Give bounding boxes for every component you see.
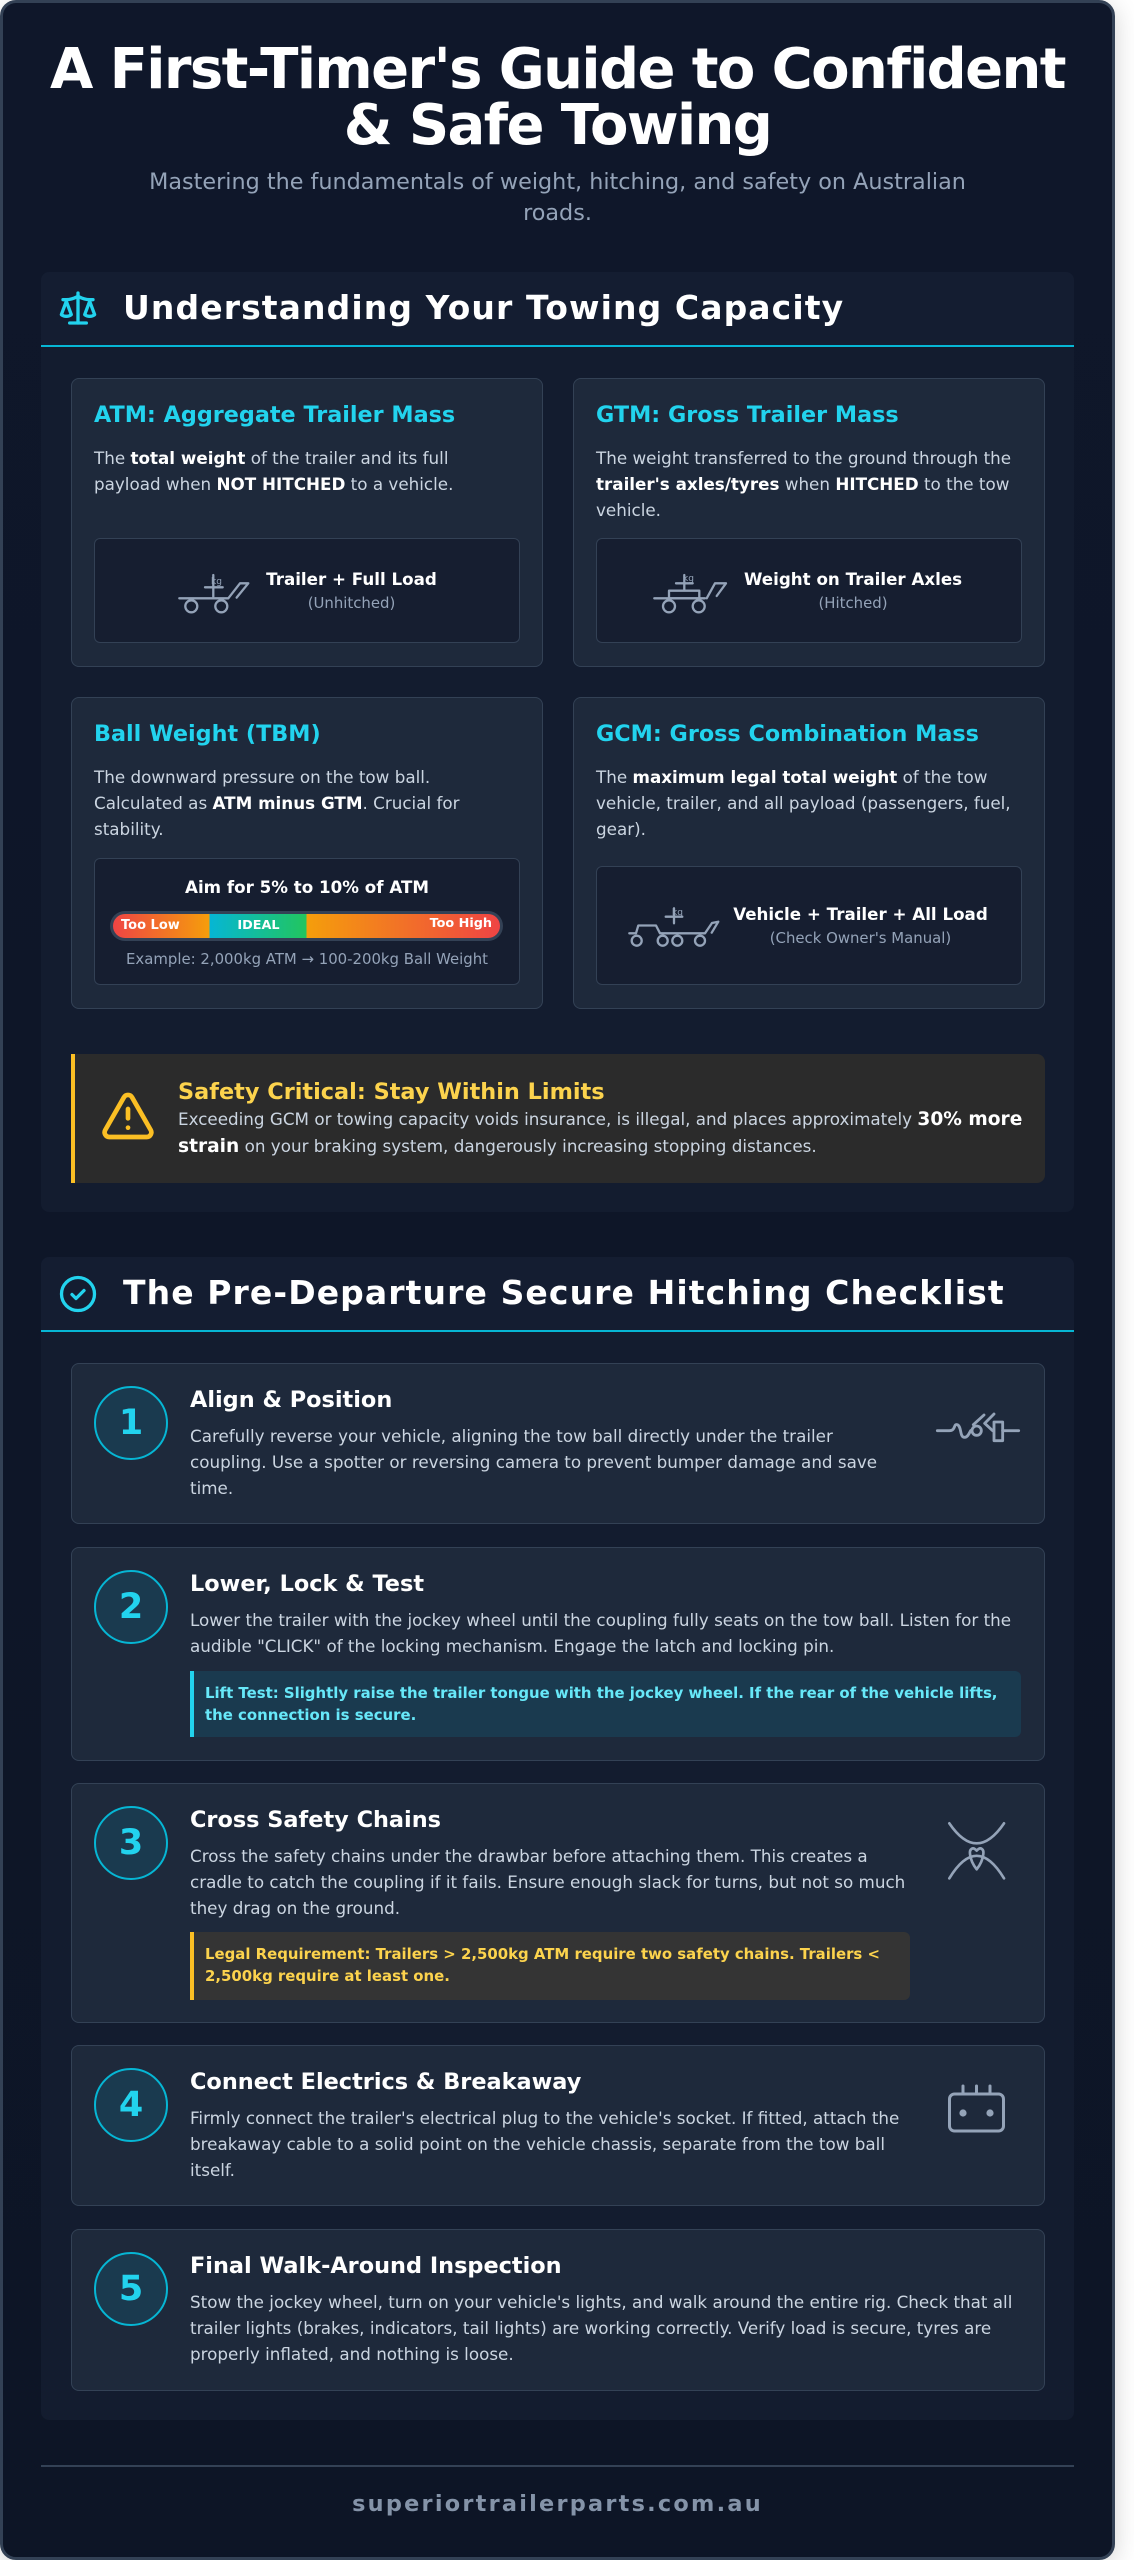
step number 5	[94, 2252, 168, 2326]
sub-label: check owner's manual: (Check Owner's Manual)	[770, 929, 951, 947]
step 3 heading: Cross Safety Chains	[190, 1807, 441, 1833]
icon: crossed chains	[948, 1822, 1006, 1880]
callout: safety critical	[71, 1054, 1045, 1183]
card text: ATM definition: The total weight of the trailer and its full	[94, 448, 448, 468]
card text: GCM definition: vehicle, trailer, and all payload (passengers, fuel,	[596, 793, 1011, 813]
card: GCM	[573, 697, 1045, 1009]
step 4	[71, 2045, 1045, 2206]
label: ideal: IDEAL	[237, 918, 280, 933]
card text: ball weight definition: stability.	[94, 819, 164, 839]
card: ATM	[71, 378, 543, 667]
section header: checklist	[41, 1257, 1074, 1332]
title: A First-Timer's Guide to Confident	[50, 37, 1065, 102]
step 5 text	[190, 2292, 1012, 2364]
footer website: superiortrailerparts.com.au	[352, 2491, 763, 2517]
step 2	[71, 1547, 1045, 1761]
icon: vehicle and trailer	[628, 907, 720, 947]
label: vehicle plus trailer plus all load: Vehicle + Trailer + All Load	[733, 904, 988, 924]
card text: ATM definition	[94, 448, 453, 494]
step 4 text: breakaway cable to a solid point on the vehicle chassis, separate from the tow ball	[190, 2134, 885, 2154]
step number 3: 3	[119, 1823, 143, 1863]
icon: circled check	[60, 1276, 96, 1312]
step 2 text: audible "CLICK" of the locking mechanism. Engage the latch and locking pin.	[190, 1636, 834, 1656]
card text: GTM definition: The weight transferred to the ground through the	[596, 448, 1011, 468]
step number 5: 5	[119, 2269, 143, 2309]
step 5	[71, 2229, 1045, 2391]
step 1 text: Carefully reverse your vehicle, aligning the tow ball directly under the trailer	[190, 1426, 833, 1446]
step 1 text: coupling. Use a spotter or reversing camera to prevent bumper damage and save	[190, 1452, 877, 1472]
step 5 text: Stow the jockey wheel, turn on your vehicle's lights, and walk around the entire rig. Check that all	[190, 2292, 1012, 2312]
card heading: GTM: GTM: Gross Trailer Mass	[596, 402, 899, 428]
step number 1	[94, 1386, 168, 1460]
sub-label: hitched: (Hitched)	[818, 594, 888, 612]
title: & Safe Towing	[344, 93, 771, 158]
card text: ball weight definition: Calculated as ATM minus GTM. Crucial for	[94, 793, 459, 813]
note: lift test: Lift Test: Slightly raise the trailer tongue with the jockey wheel. If the rear of the vehicle lifts,	[205, 1684, 997, 1702]
step 3 text: they drag on the ground.	[190, 1898, 400, 1918]
note: legal requirement: 2,500kg require at least one.	[205, 1967, 450, 1985]
panel: understanding your towing capacity	[41, 272, 1074, 1212]
gauge bar	[110, 911, 503, 941]
card text: GCM definition	[596, 767, 1011, 839]
step 3 text	[190, 1846, 905, 1918]
label: too high: Too High	[430, 916, 492, 931]
sub-label: unhitched: (Unhitched)	[308, 594, 395, 612]
step 3	[71, 1783, 1045, 2023]
icon: vehicle and trailer: kg	[672, 908, 683, 918]
callout text: Exceeding GCM or towing capacity voids insurance, is illegal, and places approximately 30% more	[178, 1109, 1022, 1130]
card text: ball weight definition	[94, 767, 460, 839]
icon: scales	[60, 291, 96, 325]
card text: GCM definition: The maximum legal total weight of the tow	[596, 767, 987, 787]
label: too low: Too Low	[121, 918, 180, 933]
footer rule and website	[41, 2465, 1074, 2525]
label: weight on trailer axles: Weight on Trailer Axles	[744, 569, 962, 589]
step number 2: 2	[119, 1587, 143, 1627]
panel: hitching checklist	[41, 1257, 1074, 2420]
diagram box: vehicle plus trailer plus load	[596, 866, 1022, 985]
step 4 text: itself.	[190, 2160, 235, 2180]
step 1 text	[190, 1426, 877, 1498]
gauge box: ball weight target	[94, 858, 520, 985]
callout heading: Safety Critical: Stay Within Limits	[178, 1079, 605, 1105]
step 1 heading: Align & Position	[190, 1387, 392, 1413]
label: trailer plus full load: Trailer + Full Load	[266, 569, 437, 589]
card heading: ATM: ATM: Aggregate Trailer Mass	[94, 402, 455, 428]
card heading: GCM: GCM: Gross Combination Mass	[596, 721, 979, 747]
card text: ATM definition: payload when NOT HITCHED to a vehicle.	[94, 474, 453, 494]
icon: electrical plug	[948, 2084, 1005, 2132]
card text: GTM definition: trailer's axles/tyres when HITCHED to the tow	[596, 474, 1009, 494]
step number 4	[94, 2068, 168, 2142]
icon: warning triangle	[102, 1092, 154, 1140]
icon: hitched trailer	[653, 574, 728, 614]
title	[50, 37, 1066, 158]
step number 1: 1	[119, 1403, 143, 1443]
card heading: ball weight: Ball Weight (TBM)	[94, 721, 321, 747]
card text: GCM definition: gear).	[596, 819, 646, 839]
callout text: strain on your braking system, dangerously increasing stopping distances.	[178, 1136, 817, 1157]
icon: tow ball alignment	[936, 1412, 1020, 1442]
step 4 text	[190, 2108, 899, 2180]
gauge example: Example: 2,000kg ATM → 100-200kg Ball Weight	[126, 950, 488, 968]
heading: pre-departure checklist: The Pre-Departure Secure Hitching Checklist	[123, 1273, 1005, 1312]
card text: GTM definition	[596, 448, 1011, 520]
note: legal requirement	[190, 1932, 910, 2000]
subtitle: roads.	[523, 200, 592, 226]
note: lift test: the connection is secure.	[205, 1706, 416, 1724]
step number 3	[94, 1806, 168, 1880]
step 1 text: time.	[190, 1478, 233, 1498]
step 1	[71, 1363, 1045, 1524]
step number 2	[94, 1570, 168, 1644]
step 2 heading: Lower, Lock & Test	[190, 1571, 424, 1597]
card: GTM	[573, 378, 1045, 667]
diagram box: trailer plus full load	[94, 538, 520, 643]
card text: GTM definition: vehicle.	[596, 500, 661, 520]
diagram box: weight on trailer axles	[596, 538, 1022, 643]
step 5 text: trailer lights (brakes, indicators, tail lights) are working correctly. Verify load is secure, tyres are	[190, 2318, 991, 2338]
step 4 heading: Connect Electrics & Breakaway	[190, 2069, 581, 2095]
step 5 heading: Final Walk-Around Inspection	[190, 2253, 562, 2279]
icon: unhitched trailer	[178, 574, 250, 614]
step 3 text: cradle to catch the coupling if it fails. Ensure enough slack for turns, but not so much	[190, 1872, 905, 1892]
card text: ball weight definition: The downward pressure on the tow ball.	[94, 767, 430, 787]
gauge fill	[113, 914, 500, 938]
step 3 text: Cross the safety chains under the drawbar before attaching them. This creates a	[190, 1846, 868, 1866]
icon: hitched trailer: kg	[683, 574, 694, 584]
step 2 text	[190, 1610, 1011, 1656]
step number 4: 4	[119, 2085, 143, 2125]
note: legal requirement: Legal Requirement: Trailers > 2,500kg ATM require two safety chains. Trailers <	[205, 1945, 880, 1963]
card: ball weight	[71, 697, 543, 1009]
step 4 text: Firmly connect the trailer's electrical plug to the vehicle's socket. If fitted, attach the	[190, 2108, 899, 2128]
note: lift test	[190, 1671, 1021, 1737]
subtitle	[149, 169, 966, 226]
callout text	[178, 1109, 1022, 1157]
step 5 text: properly inflated, and nothing is loose.	[190, 2344, 514, 2364]
step 2 text: Lower the trailer with the jockey wheel until the coupling fully seats on the tow ball. Listen for the	[190, 1610, 1011, 1630]
icon: unhitched trailer: kg	[211, 577, 222, 587]
gauge heading: Aim for 5% to 10% of ATM	[185, 877, 429, 897]
subtitle: Mastering the fundamentals of weight, hitching, and safety on Australian	[149, 169, 966, 195]
heading: understanding your towing capacity: Understanding Your Towing Capacity	[123, 288, 844, 327]
section header: towing capacity	[41, 272, 1074, 347]
